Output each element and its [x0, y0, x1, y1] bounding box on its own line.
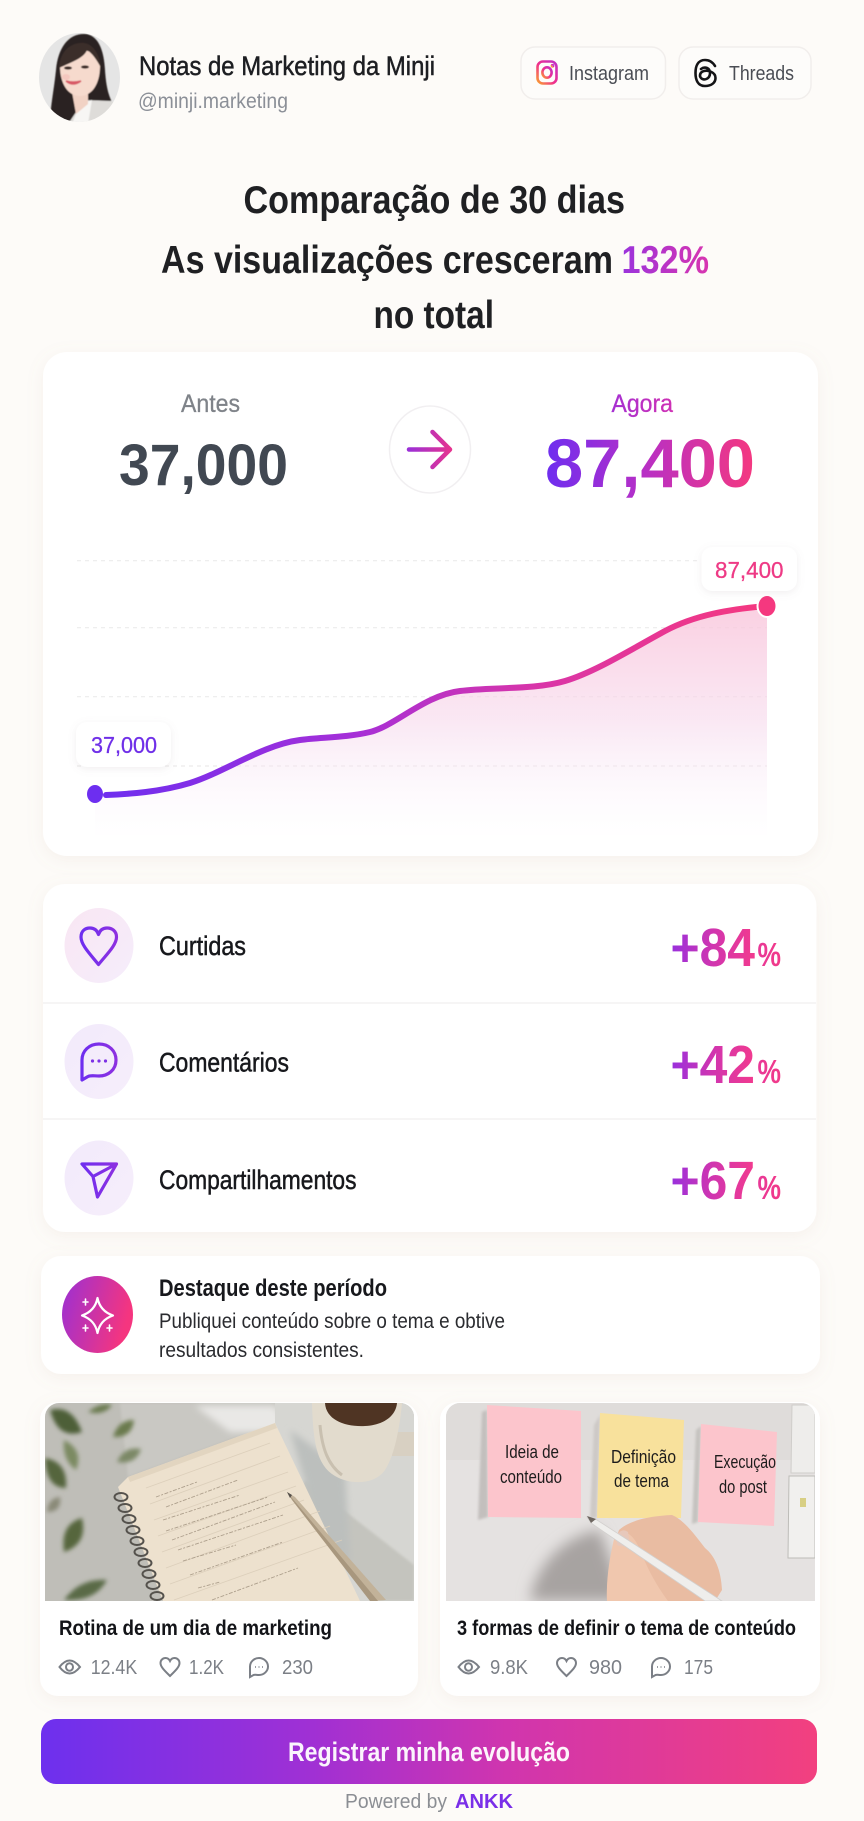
- label: 87,400: 87,400: [715, 557, 784, 583]
- icon: heart: [160, 1658, 180, 1676]
- metric: shares: [64, 1140, 781, 1216]
- metric: likes: [64, 908, 781, 983]
- note: Execução do post: [698, 1424, 777, 1526]
- notebook spiral: [114, 1493, 164, 1600]
- notebook lines: [146, 1443, 342, 1600]
- pencil: [287, 1492, 386, 1601]
- photo: sticky notes and hand: [446, 1403, 815, 1601]
- highlight text: Publiquei conteúdo sobre o tema e obtive: [159, 1310, 505, 1333]
- metric: shares: +67: [670, 1151, 755, 1211]
- button: Threads: [679, 47, 811, 99]
- metric: likes: +84: [670, 918, 755, 978]
- metric: likes: Curtidas: [159, 931, 246, 961]
- note: Ideia de conteúdo: Ideia de: [505, 1442, 559, 1462]
- area fill: [95, 606, 767, 835]
- icon: comment: [250, 1658, 268, 1677]
- notebook: [118, 1423, 360, 1601]
- footer credit: Powered by: [345, 1790, 448, 1813]
- post stats: 175: [684, 1656, 713, 1679]
- line chart: [76, 547, 797, 835]
- icon: arrow: [390, 406, 470, 493]
- avatar photo: [38, 32, 122, 124]
- metric: likes: %: [758, 936, 781, 973]
- start point: [87, 785, 103, 803]
- post stats: [60, 1656, 313, 1679]
- footer credit: ANKK: [455, 1790, 513, 1813]
- icon: heart: [557, 1658, 576, 1676]
- post stats: 9.8K: [490, 1656, 528, 1679]
- account name: Notas de Marketing da Minji: [139, 51, 435, 81]
- end point: [758, 595, 776, 617]
- wall papers: [788, 1405, 815, 1558]
- post stats: 12.4K: [91, 1656, 137, 1679]
- panel: period highlight: [41, 1256, 820, 1374]
- post stats: 230: [282, 1656, 313, 1679]
- growth line: [106, 606, 767, 795]
- metric: comments: [64, 1024, 781, 1099]
- metric: comments: %: [758, 1053, 781, 1090]
- highlight text: resultados consistentes.: [159, 1339, 364, 1362]
- footer credit: [345, 1790, 513, 1813]
- highlight: 132%: 132%: [622, 239, 709, 282]
- panel: post card 1: [40, 1402, 418, 1696]
- note: Ideia de conteúdo: conteúdo: [500, 1467, 562, 1487]
- label: 87,400: [702, 547, 797, 591]
- post title: Rotina de um dia de marketing: [59, 1616, 332, 1640]
- after label: Agora: [612, 390, 673, 418]
- metric: shares: Compartilhamentos: [159, 1165, 356, 1195]
- metric: comments: +42: [670, 1035, 755, 1095]
- icon: instagram: [538, 62, 556, 84]
- icon: paper plane: [82, 1164, 116, 1197]
- label: Instagram: Instagram: [569, 62, 649, 85]
- call to action button: [41, 1719, 817, 1784]
- icon: eye: [60, 1660, 80, 1674]
- plant leaves: [45, 1404, 141, 1600]
- hand with pen: [587, 1515, 722, 1601]
- label: Threads: Threads: [729, 62, 794, 85]
- metric: shares: %: [758, 1169, 781, 1206]
- label: 37,000: 37,000: [91, 732, 157, 758]
- highlight heading: Destaque deste período: [159, 1275, 387, 1302]
- panel: post card 2: [440, 1402, 820, 1696]
- panel: engagement metrics: [43, 884, 816, 1232]
- before value: 37,000: [119, 433, 288, 498]
- note: Ideia de conteúdo: [487, 1405, 581, 1518]
- note: Definição de tema: de tema: [614, 1471, 670, 1491]
- after value: 87,400: [545, 425, 755, 502]
- note: Execução do post: do post: [719, 1477, 767, 1497]
- handwriting: [156, 1480, 298, 1600]
- post title: 3 formas de definir o tema de conteúdo: [457, 1616, 796, 1640]
- photo: notebook and coffee: [45, 1403, 414, 1601]
- highlight text: [159, 1310, 505, 1362]
- icon: threads: [696, 60, 716, 86]
- metric: comments: Comentários: [159, 1048, 289, 1078]
- header: profile: [38, 32, 435, 124]
- before label: Antes: [181, 390, 240, 418]
- icon: heart: [81, 928, 116, 964]
- button: Instagram: [521, 47, 666, 99]
- post stats: [458, 1656, 713, 1679]
- title: no total: [374, 294, 494, 337]
- title: Comparação de 30 dias: [244, 179, 625, 222]
- icon: speech bubble: [82, 1044, 116, 1080]
- hand shadow: [530, 1530, 625, 1601]
- post stats: 1.2K: [189, 1656, 224, 1679]
- title: As visualizações cresceram: [161, 239, 613, 282]
- coffee mug: [392, 1432, 414, 1456]
- label: 37,000: [76, 722, 171, 767]
- note: Definição de tema: [597, 1413, 684, 1518]
- note: Definição de tema: Definição: [611, 1447, 676, 1467]
- title: [161, 179, 709, 337]
- account handle: @minji.marketing: [138, 89, 288, 113]
- call to action button: Registrar minha evolução: [288, 1737, 570, 1767]
- note: Execução do post: Execução: [714, 1452, 776, 1472]
- panel: before and after comparison with chart: [43, 352, 818, 856]
- post stats: 980: [589, 1656, 622, 1679]
- icon: eye: [458, 1660, 479, 1674]
- icon: sparkles: [62, 1276, 133, 1353]
- icon: comment: [652, 1658, 670, 1677]
